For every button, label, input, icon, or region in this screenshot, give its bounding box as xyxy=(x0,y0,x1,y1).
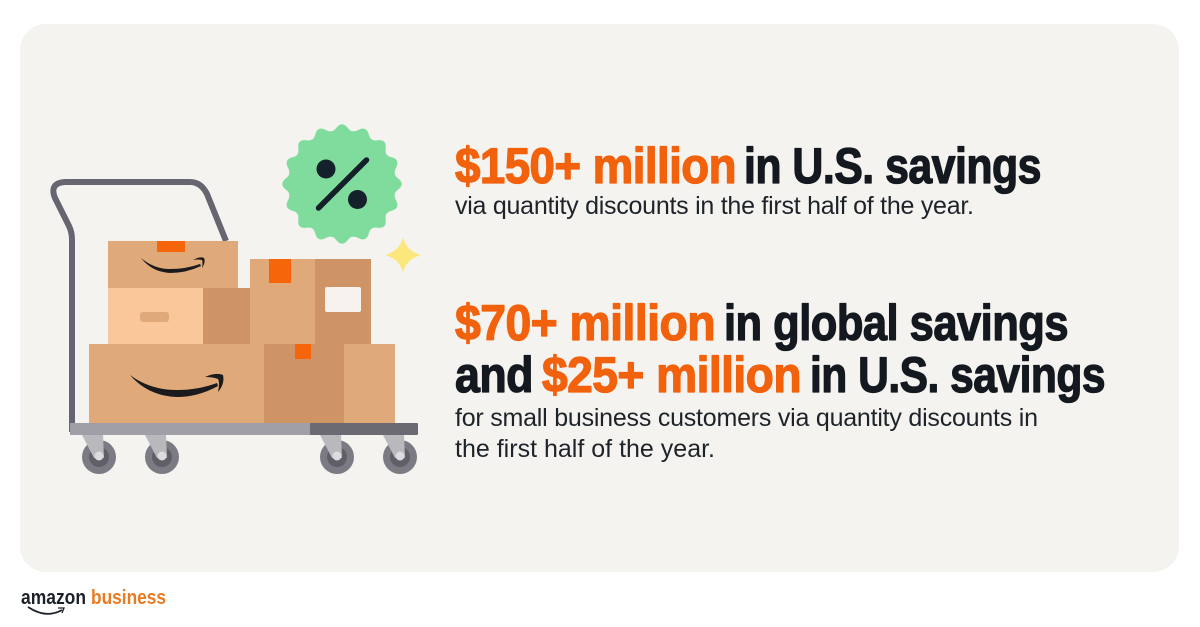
box: drawer xyxy=(108,288,250,344)
heading: $70+ million in global savings: $70+ million xyxy=(455,295,715,351)
heading: $70+ million in global savings xyxy=(455,295,1068,351)
logo: amazon business xyxy=(21,587,166,614)
heading: and $25+ million in U.S. savings: $25+ million xyxy=(542,347,801,403)
heading: $150+ million in U.S. savings xyxy=(455,138,1041,194)
logo: amazon business: business xyxy=(91,587,166,609)
cart handle xyxy=(53,182,226,432)
cart platform xyxy=(70,423,418,435)
heading: and $25+ million in U.S. savings: and xyxy=(455,347,533,403)
logo: amazon business: amazon xyxy=(21,587,86,609)
box: bottom with smile xyxy=(89,344,265,424)
icon: sparkle xyxy=(385,237,421,273)
box: bottom right xyxy=(264,344,395,424)
heading: and $25+ million in U.S. savings: in U.S. savings xyxy=(810,347,1105,403)
stat: global and small business savings xyxy=(455,295,1105,463)
heading: $150+ million in U.S. savings: $150+ million xyxy=(455,138,736,194)
heading: $70+ million in global savings: in global savings xyxy=(724,295,1068,351)
heading: and $25+ million in U.S. savings xyxy=(455,347,1105,403)
box: top with smile xyxy=(108,241,238,289)
icon: percent badge xyxy=(282,124,402,244)
text: quantity discounts note: via quantity discounts in the first half of the year. xyxy=(455,192,974,220)
illustration: cart with boxes xyxy=(53,182,418,474)
text: small business note: for small business customers via quantity discounts in xyxy=(455,404,1038,432)
box: right with label xyxy=(250,259,371,345)
cart wheels xyxy=(82,435,417,474)
text: small business note: the first half of the year. xyxy=(455,435,715,463)
heading: $150+ million in U.S. savings: in U.S. savings xyxy=(744,138,1041,194)
stat: U.S. savings xyxy=(455,138,1041,220)
text: small business note xyxy=(455,404,1038,463)
